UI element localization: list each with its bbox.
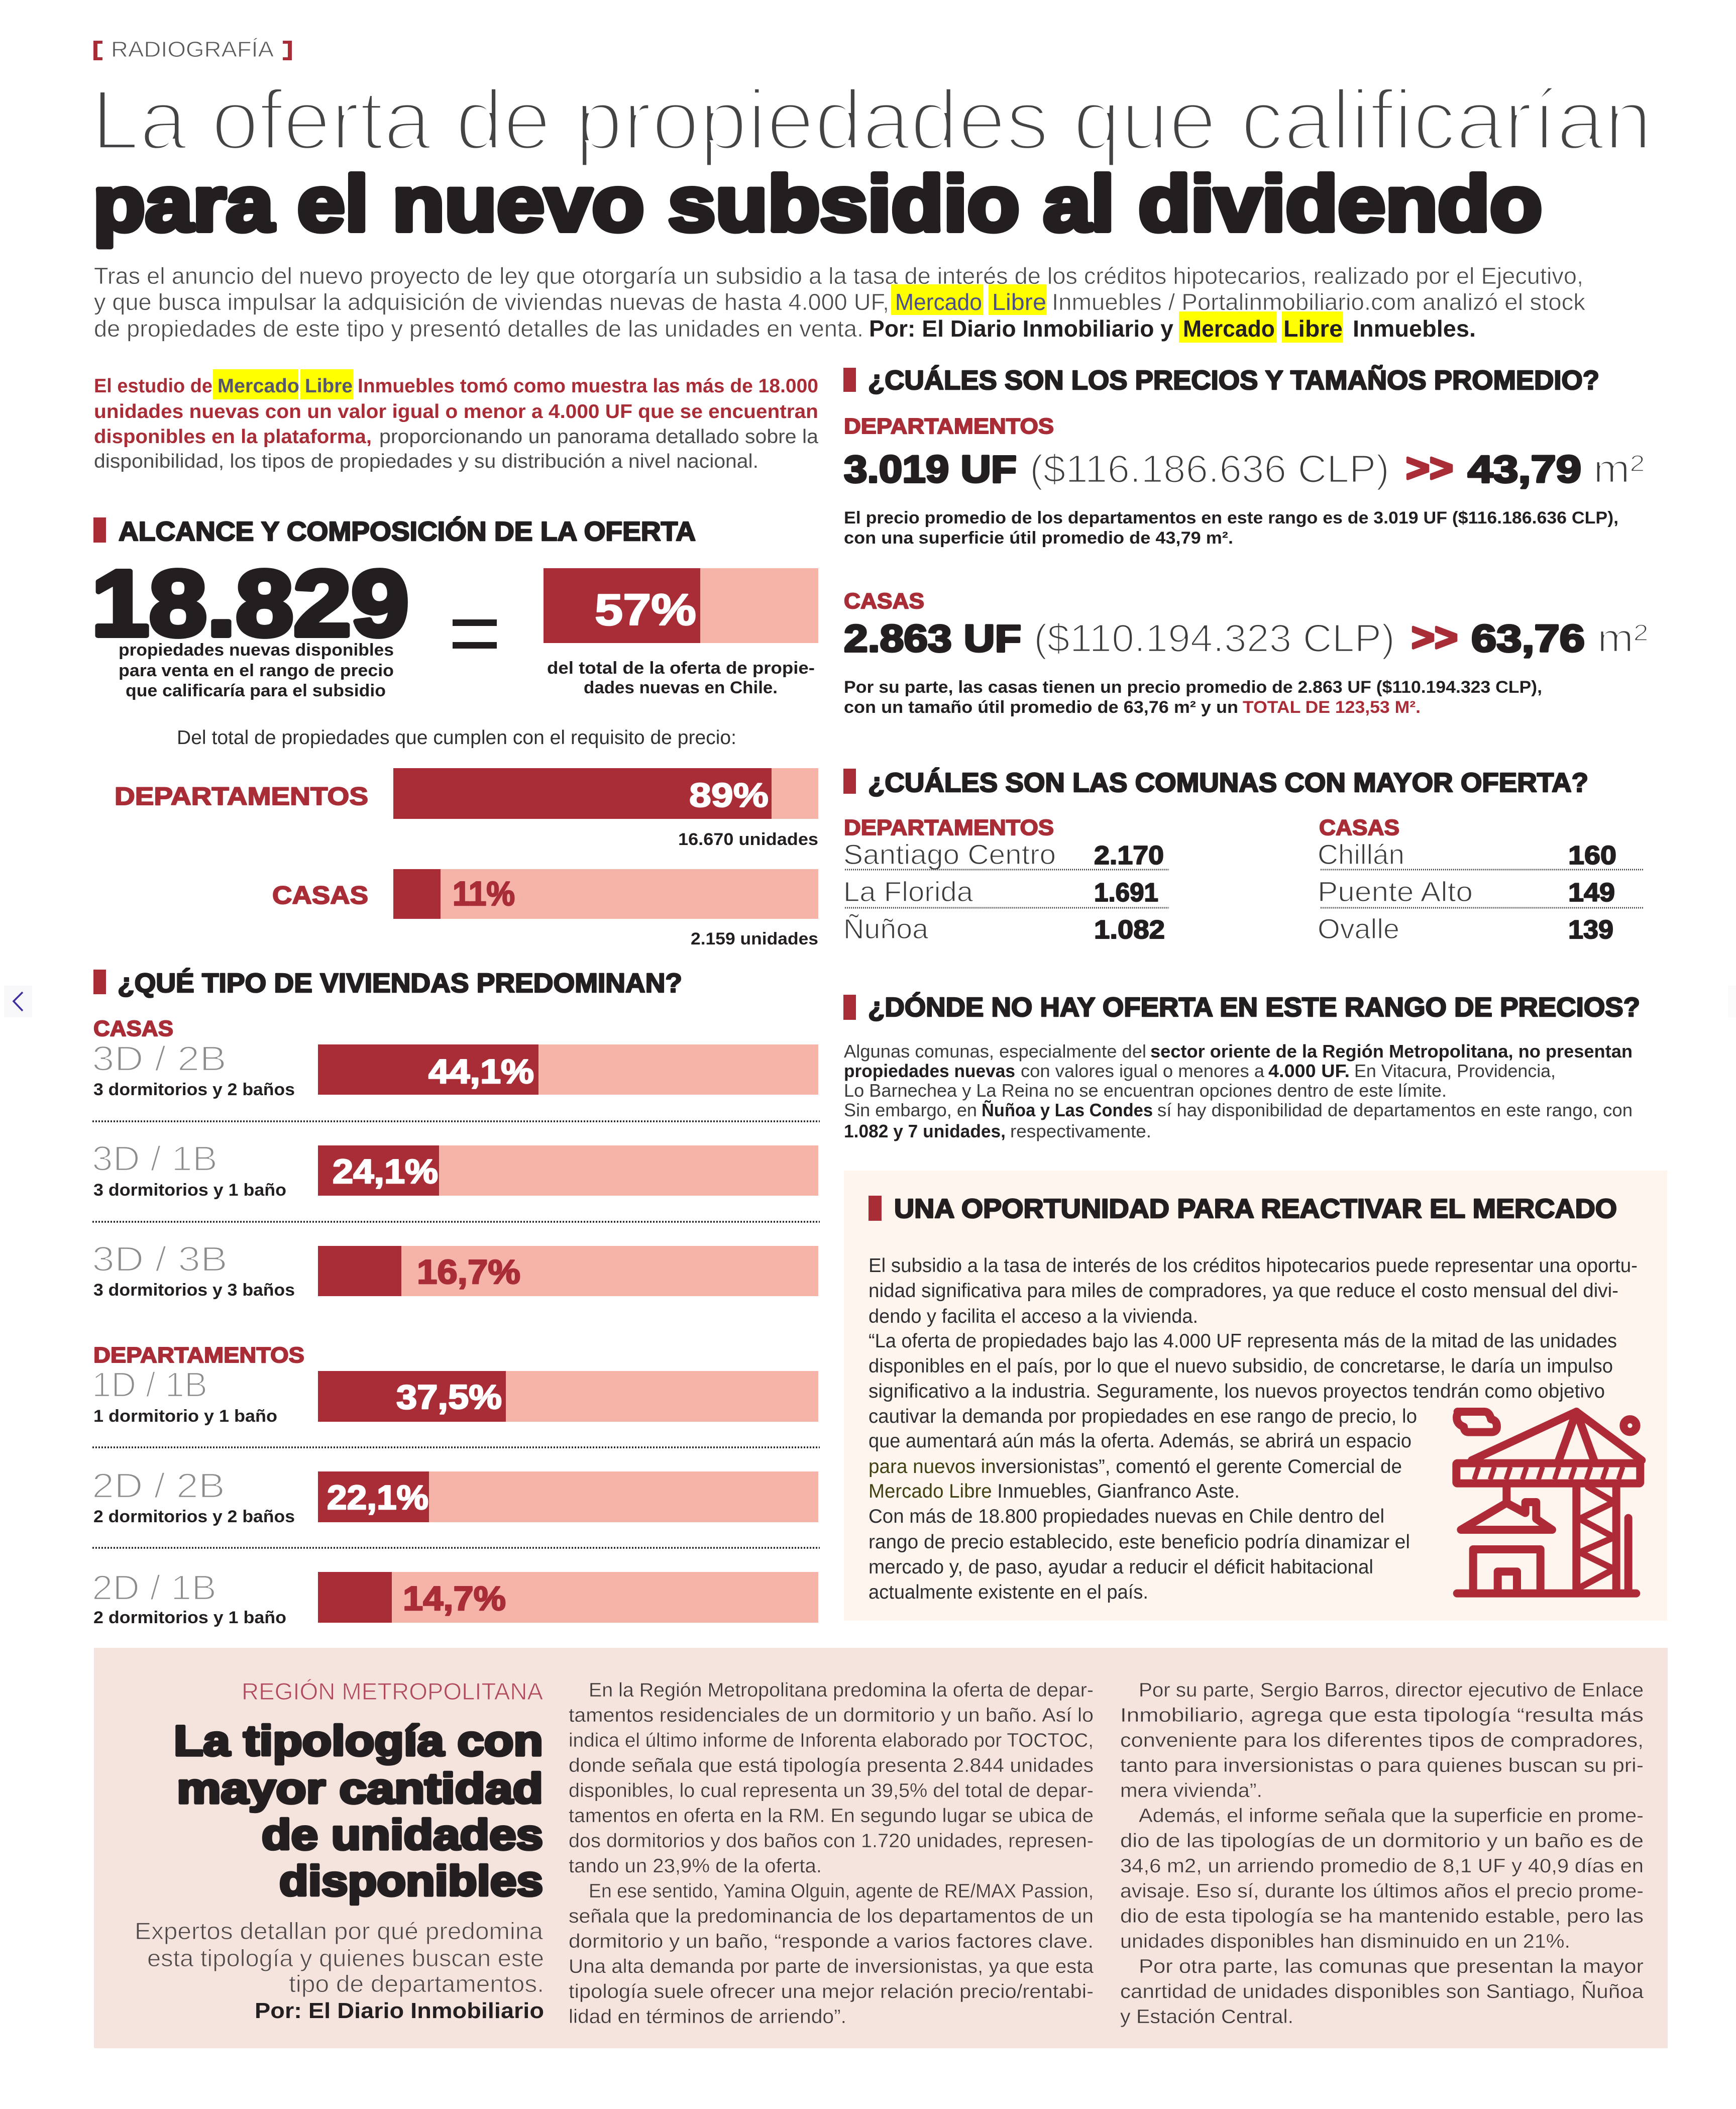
row: 1D / 1B 37,5%: [92, 1365, 818, 1426]
intro text block: Inmuebles.: [1353, 315, 1476, 342]
article column 2: canrtidad de unidades disponibles son Santiago, Ñuñoa: [1120, 1981, 1644, 2002]
lead paragraph: Inmuebles tomó como muestra las más de 18.000: [358, 375, 818, 397]
right navigation tab: [1728, 986, 1736, 1017]
prices: casas: [844, 589, 1648, 717]
prices: departamentos: DEPARTAMENTOS: [844, 414, 1054, 439]
subheading: [135, 1918, 544, 2023]
heading: la tipología: La tipología con: [174, 1717, 543, 1764]
big stat: 18.829: propiedades nuevas disponibles: [119, 641, 394, 660]
subheading: Por: El Diario Inmobiliario: [255, 1998, 544, 2023]
intro text block: Mercado: [895, 289, 982, 315]
icon: construction crane: [1456, 1412, 1642, 1594]
table: comunas departamentos: Ñuñoa: [843, 913, 929, 944]
article column 2: [1120, 1679, 1644, 2028]
panel text: [869, 1255, 1638, 1603]
intro text block: y que busca impulsar la adquisición de viviendas nuevas de hasta 4.000 UF,: [94, 289, 889, 315]
prices: departamentos: 3.019 UF: [844, 448, 1017, 491]
intro text block: Mercado: [1183, 315, 1275, 342]
prices: casas: >>: [1412, 615, 1458, 659]
lead paragraph: Mercado: [218, 375, 299, 397]
big stat: 18.829: que calificaría para el subsidio: [126, 681, 386, 700]
intro text block: de propiedades de este tipo y presentó detalles de las unidades en venta.: [94, 315, 863, 342]
row: 3D / 3B 16,7%: 3D / 3B: [92, 1239, 228, 1279]
subheading: casas: CASAS: [93, 1016, 173, 1041]
text block: sin oferta: sector oriente de la Región Metropolitana, no presentan: [1150, 1041, 1633, 1062]
article column 1: dormitorio y un baño, “responde a varios factores clave.: [569, 1931, 1094, 1952]
prices: departamentos: con una superficie útil promedio de 43,79 m².: [844, 529, 1233, 548]
panel text: dendo y facilita el acceso a la vivienda.: [869, 1306, 1198, 1327]
article column 1: indica el último informe de Inforenta elaborado por TOCTOC,: [569, 1730, 1094, 1751]
article column 1: tipología suele ofrecer una mejor relación precio/rentabi-: [569, 1981, 1094, 2002]
prices: casas: CASAS: [844, 589, 924, 613]
bar: 57%: [544, 568, 818, 697]
panel text: actualmente existente en el país.: [869, 1581, 1148, 1603]
intro text block: [94, 263, 1586, 343]
bar chart: casas 11%: 11%: [453, 875, 515, 913]
panel text: para nuevos inversionistas”, comentó el gerente Comercial de: [869, 1456, 1402, 1478]
article column 1: dos dormitorios y dos baños con 1.720 unidades, represen-: [569, 1830, 1094, 1852]
bar chart: departamentos 89%: 89%: [689, 776, 769, 814]
text block: sin oferta: respectivamente.: [1010, 1121, 1151, 1141]
bar chart: departamentos 89%: 16.670 unidades: [678, 830, 818, 849]
row: 2D / 2B 22,1%: 22,1%: [327, 1479, 428, 1517]
prices: departamentos: m²: [1593, 447, 1645, 491]
row: 2D / 1B 14,7%: [92, 1568, 818, 1627]
prices: casas: TOTAL DE 123,53 M².: [1243, 698, 1421, 717]
article column 1: Una alta demanda por parte de inversionistas, ya que esta: [569, 1956, 1094, 1977]
prices: departamentos: >>: [1406, 446, 1453, 490]
article column 2: Inmobiliario, agrega que esta tipología “resulta más: [1120, 1705, 1644, 1726]
text block: sin oferta: 4.000 UF.: [1268, 1061, 1350, 1081]
article column 2: tanto para inversionistas o para quienes buscan su pri-: [1120, 1755, 1644, 1776]
bar: 57%: del total de la oferta de propie-: [547, 659, 815, 678]
title: [91, 72, 1652, 248]
row: 3D / 1B 24,1%: 24,1%: [333, 1152, 438, 1191]
panel: región metropolitana: [94, 1648, 1668, 2048]
prices: casas: ($110.194.323 CLP): [1034, 616, 1395, 660]
heading: la tipología: disponibles: [279, 1857, 543, 1905]
text block: sin oferta: con valores igual o menores a: [1021, 1061, 1265, 1081]
article column 2: y Estación Central.: [1120, 2006, 1293, 2028]
article column 1: [569, 1679, 1094, 2028]
icon: left navigation chevron: [4, 986, 32, 1017]
article column 2: Por otra parte, las comunas que presentan la mayor: [1139, 1956, 1644, 1977]
subheading: tipo de departamentos.: [289, 1970, 544, 1997]
heading: la tipología: mayor cantidad: [177, 1765, 543, 1812]
title: para el nuevo subsidio al dividendo: [93, 160, 1542, 248]
lead paragraph: disponibilidad, los tipos de propiedades y su distribución a nivel nacional.: [94, 451, 758, 472]
intro text block: Tras el anuncio del nuevo proyecto de ley que otorgaría un subsidio a la tasa de interés de los créditos hipotecarios, realizado por el Ejecutivo,: [94, 263, 1583, 289]
row: 1D / 1B 37,5%: 1 dormitorio y 1 baño: [93, 1407, 277, 1426]
panel text: Con más de 18.800 propiedades nuevas en Chile dentro del: [869, 1506, 1384, 1527]
article column 2: dio de las tipologías de un dormitorio y un baño es de: [1120, 1830, 1644, 1852]
panel text: El subsidio a la tasa de interés de los créditos hipotecarios puede representar una oportu-: [869, 1255, 1638, 1277]
article column 2: mera vivienda”.: [1120, 1780, 1262, 1802]
panel text: significativo a la industria. Seguramente, los nuevos proyectos tendrán como objetivo: [869, 1381, 1605, 1402]
heading: alcance y composición: ALCANCE Y COMPOSICIÓN DE LA OFERTA: [119, 516, 696, 547]
article column 1: tamentos en oferta en la RM. En segundo lugar se ubica de: [569, 1805, 1094, 1827]
bar chart: departamentos 89%: DEPARTAMENTOS: [115, 782, 368, 810]
prices: departamentos: 43,79: [1468, 448, 1581, 491]
panel text: mercado y, de paso, ayudar a reducir el déficit habitacional: [869, 1556, 1373, 1578]
text block: sin oferta: Algunas comunas, especialmente del: [844, 1041, 1146, 1062]
panel text: Mercado Libre Inmuebles, Gianfranco Aste.: [869, 1481, 1240, 1502]
row: 2D / 1B 14,7%: 2D / 1B: [92, 1568, 216, 1607]
article column 2: Además, el informe señala que la superficie en prome-: [1139, 1805, 1644, 1827]
prices: casas: m²: [1597, 616, 1648, 660]
table: comunas casas: CASAS: [1319, 815, 1399, 840]
table: comunas departamentos: La Florida: [843, 876, 973, 907]
bar: 57%: 57%: [595, 585, 696, 635]
kicker: región metropolitana: REGIÓN METROPOLITANA: [242, 1678, 544, 1705]
prices: casas: 2.863 UF: [844, 617, 1021, 660]
row: 2D / 2B 22,1%: [92, 1466, 818, 1526]
article column 1: disponibles, lo cual representa un 39,5% del total de depar-: [569, 1780, 1094, 1802]
big stat: 18.829: 18.829: [91, 552, 409, 656]
subheading: esta tipología y quienes buscan este: [147, 1945, 544, 1971]
row: 3D / 3B 16,7%: [92, 1239, 818, 1300]
row: 3D / 3B 16,7%: 3 dormitorios y 3 baños: [93, 1281, 295, 1300]
row: 1D / 1B 37,5%: 1D / 1B: [92, 1365, 207, 1404]
article column 1: tando un 23,9% de la oferta.: [569, 1855, 822, 1877]
prices: casas: Por su parte, las casas tienen un precio promedio de 2.863 UF ($110.194.323 CLP),: [844, 678, 1542, 697]
panel text: rango de precio establecido, este beneficio podría dinamizar el: [869, 1531, 1410, 1553]
article column 1: tamentos residenciales de un dormitorio y un baño. Así lo: [569, 1705, 1094, 1726]
row: 2D / 1B 14,7%: 14,7%: [403, 1579, 506, 1618]
article column 2: avisaje. Eso sí, durante los últimos años el precio prome-: [1120, 1880, 1644, 1902]
table: comunas casas: 139: [1568, 915, 1613, 944]
text block: sin oferta: Sin embargo, en: [844, 1100, 977, 1120]
row: 2D / 1B 14,7%: 2 dormitorios y 1 baño: [93, 1608, 286, 1627]
title: La oferta de propiedades que calificarían: [91, 72, 1652, 168]
panel text: cautivar la demanda por propiedades en ese rango de precio, lo: [869, 1406, 1417, 1427]
prices: departamentos: El precio promedio de los departamentos en este rango es de 3.019 UF ($116.186.636 CLP),: [844, 508, 1618, 528]
text block: sin oferta: sí hay disponibilidad de departamentos en este rango, con: [1157, 1100, 1633, 1120]
kicker: radiografía: RADIOGRAFÍA: [111, 37, 274, 62]
article column 1: En la Región Metropolitana predomina la oferta de depar-: [589, 1679, 1094, 1701]
text block: sin oferta: Ñuñoa y Las Condes: [982, 1099, 1153, 1120]
intro text block: Libre: [1283, 315, 1343, 342]
lead paragraph: disponibles en la plataforma,: [94, 426, 372, 448]
bar chart: departamentos 89%: [115, 768, 818, 849]
prices: departamentos: [844, 414, 1645, 548]
bar: 57%: dades nuevas en Chile.: [584, 678, 778, 697]
panel: una oportunidad para reactivar el mercado: [844, 1171, 1667, 1621]
prices: casas: 63,76: [1471, 617, 1585, 660]
text block: sin oferta: 1.082 y 7 unidades,: [844, 1121, 1006, 1141]
subheading: Expertos detallan por qué predomina: [135, 1918, 544, 1944]
row: 3D / 2B 44,1%: 3 dormitorios y 2 baños: [93, 1080, 295, 1099]
row: 3D / 1B 24,1%: 3D / 1B: [92, 1139, 218, 1178]
lead paragraph: El estudio de: [94, 375, 212, 397]
table: comunas departamentos: [843, 815, 1169, 944]
article column 2: conveniente para los diferentes tipos de compradores,: [1120, 1730, 1644, 1751]
intro text block: Por: El Diario Inmobiliario y: [869, 315, 1173, 342]
text block: sin oferta: En Vitacura, Providencia,: [1354, 1061, 1556, 1081]
article column 1: lidad en términos de arriendo”.: [569, 2006, 846, 2028]
article column 1: donde señala que está tipología presenta 2.844 unidades: [569, 1755, 1094, 1776]
article column 1: En ese sentido, Yamina Olguin, agente de RE/MAX Passion,: [589, 1880, 1094, 1902]
panel heading: UNA OPORTUNIDAD PARA REACTIVAR EL MERCADO: [894, 1194, 1617, 1224]
row: 3D / 1B 24,1%: [92, 1139, 818, 1200]
table: comunas departamentos: 1.691: [1094, 878, 1158, 907]
article column 2: 34,6 m2, un arriendo promedio de 8,1 UF y 40,9 días en: [1120, 1855, 1644, 1877]
big stat: 18.829: para venta en el rango de precio: [119, 661, 394, 680]
lead paragraph: [94, 369, 818, 472]
panel text: nidad significativa para miles de compradores, ya que reduce el costo mensual del divi-: [869, 1280, 1618, 1302]
heading: precios y tamaños: ¿CUÁLES SON LOS PRECIOS Y TAMAÑOS PROMEDIO?: [868, 365, 1599, 395]
subheading: departamentos: DEPARTAMENTOS: [93, 1343, 304, 1367]
lead paragraph: proporcionando un panorama detallado sobre la: [379, 426, 818, 448]
table: comunas casas: Ovalle: [1318, 913, 1399, 944]
article column 1: señala que la predominancia de los departamentos de un: [569, 1906, 1094, 1927]
bar chart: casas 11%: [272, 869, 818, 948]
article column 2: unidades disponibles han disminuido en un 21%.: [1120, 1931, 1570, 1952]
table: comunas casas: Chillán: [1318, 838, 1404, 870]
table: comunas casas: [1318, 815, 1644, 944]
big stat: 18.829: [91, 552, 409, 700]
row: 3D / 3B 16,7%: 16,7%: [417, 1253, 520, 1291]
row: 3D / 1B 24,1%: 3 dormitorios y 1 baño: [93, 1181, 286, 1200]
article column 2: dio de esta tipología se ha mantenido estable, pero las: [1120, 1906, 1644, 1927]
prices: departamentos: ($116.186.636 CLP): [1030, 447, 1389, 491]
panel text: que aumentará aún más la oferta. Además, se abrirá un espacio: [869, 1430, 1412, 1452]
row: 3D / 2B 44,1%: [92, 1039, 818, 1099]
text: del total de propiedades: Del total de propiedades que cumplen con el requisito de precio:: [177, 727, 736, 749]
lead paragraph: unidades nuevas con un valor igual o menor a 4.000 UF que se encuentran: [94, 401, 818, 423]
bar chart: casas 11%: 2.159 unidades: [691, 929, 818, 948]
table: comunas departamentos: DEPARTAMENTOS: [844, 815, 1054, 840]
heading: comunas con mayor oferta: ¿CUÁLES SON LAS COMUNAS CON MAYOR OFERTA?: [868, 768, 1588, 798]
article column 2: Por su parte, Sergio Barros, director ejecutivo de Enlace: [1139, 1679, 1644, 1701]
table: comunas casas: Puente Alto: [1318, 876, 1473, 907]
text block: sin oferta: [844, 1041, 1633, 1141]
text block: sin oferta: Lo Barnechea y La Reina no se encuentran opciones dentro de este límite.: [844, 1080, 1447, 1101]
row: 3D / 2B 44,1%: 44,1%: [428, 1052, 534, 1091]
text block: sin oferta: propiedades nuevas: [844, 1061, 1015, 1081]
intro text block: Inmuebles / Portalinmobiliario.com analizó el stock: [1052, 289, 1586, 315]
bar chart: casas 11%: CASAS: [272, 881, 368, 909]
equals sign: [453, 619, 497, 649]
heading: la tipología: de unidades: [262, 1811, 543, 1858]
row: 1D / 1B 37,5%: 37,5%: [396, 1378, 502, 1416]
table: comunas casas: 160: [1568, 841, 1616, 870]
panel text: disponibles en el país, por lo que el nuevo subsidio, de concretarse, le daría un impulso: [869, 1355, 1613, 1377]
heading: la tipología: [174, 1717, 543, 1905]
table: comunas casas: 149: [1568, 878, 1615, 907]
row: 2D / 2B 22,1%: 2D / 2B: [92, 1466, 225, 1505]
table: comunas departamentos: Santiago Centro: [843, 838, 1056, 870]
row: 2D / 2B 22,1%: 2 dormitorios y 2 baños: [93, 1507, 295, 1526]
heading: dónde no hay oferta: ¿DÓNDE NO HAY OFERTA EN ESTE RANGO DE PRECIOS?: [868, 992, 1640, 1022]
table: comunas departamentos: 1.082: [1094, 915, 1165, 944]
prices: casas: con un tamaño útil promedio de 63,76 m² y un: [844, 698, 1238, 717]
intro text block: Libre: [992, 289, 1046, 315]
table: comunas departamentos: 2.170: [1094, 841, 1164, 870]
lead paragraph: Libre: [305, 375, 353, 397]
heading: qué tipo de viviendas: ¿QUÉ TIPO DE VIVIENDAS PREDOMINAN?: [118, 968, 682, 998]
panel text: “La oferta de propiedades bajo las 4.000 UF representa más de la mitad de las unidades: [869, 1330, 1617, 1352]
row: 3D / 2B 44,1%: 3D / 2B: [92, 1039, 227, 1078]
